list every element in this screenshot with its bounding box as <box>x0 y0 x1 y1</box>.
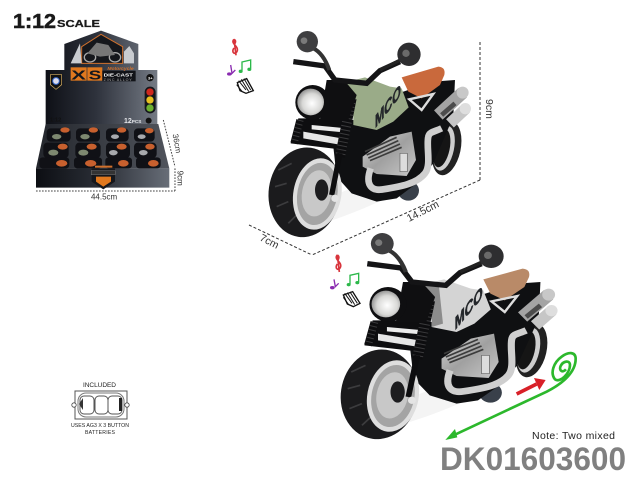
rear exhausts <box>523 289 558 325</box>
scale heading <box>13 11 100 33</box>
box logo XD: Motorcycle <box>107 66 134 72</box>
tank: MCO <box>455 282 483 335</box>
front forks <box>368 300 430 404</box>
age badge: 3+ <box>148 75 153 80</box>
box shield emblem <box>50 75 62 89</box>
frame <box>332 80 455 202</box>
radiator and forks bracket <box>291 118 348 150</box>
mirror left <box>371 233 406 272</box>
dimension labels bike one: 7cm <box>258 232 281 252</box>
treble clef <box>336 255 341 272</box>
speaker icon <box>237 79 253 93</box>
mirror left <box>297 31 329 70</box>
front wheel <box>263 143 347 242</box>
box scale and count labels: 12PCS <box>124 118 141 125</box>
box dimension labels <box>91 133 185 201</box>
age badge <box>146 74 154 81</box>
box logo XD: X <box>71 68 87 82</box>
scale heading: 1:12 <box>13 11 56 33</box>
scale heading: SCALE <box>57 18 100 30</box>
box front orange badge <box>91 166 115 189</box>
tank <box>417 279 491 335</box>
tank <box>339 77 409 133</box>
box inner tray <box>36 124 169 168</box>
silver exhaust pipe <box>448 330 526 392</box>
kickstand wheel <box>479 383 502 403</box>
miniature bikes in tray <box>39 127 161 168</box>
box logo XD <box>71 66 136 82</box>
sound icons top <box>227 39 253 93</box>
motorcycle one: green <box>263 31 471 242</box>
rear exhausts <box>438 87 471 123</box>
red direction arrow <box>517 378 546 394</box>
dimension lines bike one <box>249 42 480 255</box>
headlight <box>369 282 435 322</box>
engine <box>442 334 499 378</box>
dimension labels bike one: 9cm <box>483 99 495 119</box>
seat bracket white <box>492 296 517 312</box>
green note <box>350 273 359 284</box>
motorcycle two: silver <box>335 233 558 444</box>
box scale and count labels: 1:12 <box>50 117 61 123</box>
purple note <box>231 65 235 73</box>
seat <box>402 67 445 98</box>
box dimension lines <box>36 120 175 191</box>
ground shadow <box>281 162 426 238</box>
battery diagram: INCLUDED <box>83 382 116 389</box>
dimension labels bike one: 14.5cm <box>405 198 441 225</box>
mirror right <box>380 43 421 70</box>
headlight <box>295 80 357 120</box>
box logo XD: DIE-CAST <box>104 72 133 78</box>
engine <box>363 132 416 176</box>
handlebars <box>367 264 482 285</box>
speaker icon <box>343 292 360 307</box>
battery diagram <box>71 382 129 436</box>
purple note <box>334 279 339 287</box>
box logo XD: S <box>89 68 101 82</box>
box dimension labels: 9cm <box>176 171 185 186</box>
seat <box>483 269 529 300</box>
dimension labels bike one <box>258 99 495 252</box>
mirror right <box>460 245 504 272</box>
display box <box>36 31 185 201</box>
note text: Note: Two mixed <box>532 430 615 442</box>
battery diagram: USES AG3 X 3 BUTTON <box>71 423 129 429</box>
front forks <box>294 98 352 202</box>
box dimension labels: 36cm <box>171 133 183 154</box>
tank: MCO <box>375 80 401 133</box>
seat bracket white <box>409 94 433 110</box>
box front panel <box>36 168 169 188</box>
box logo XD: ZINC ALLOY <box>104 78 132 82</box>
treble clef <box>233 39 237 55</box>
box scale and count labels <box>50 117 152 125</box>
box back panel <box>46 31 157 126</box>
battery diagram: BATTERIES <box>85 430 116 436</box>
sound icons bottom <box>330 255 360 307</box>
box header badge: motorcycle <box>71 34 134 63</box>
green pull-back spiral arrow <box>445 353 576 440</box>
rear wheel <box>511 321 552 380</box>
silver exhaust pipe <box>368 128 442 190</box>
handlebars <box>293 62 400 83</box>
rear wheel <box>427 119 466 178</box>
front wheel <box>335 345 425 444</box>
frame <box>408 282 540 404</box>
ground shadow <box>354 364 509 440</box>
radiator and forks bracket <box>364 320 426 352</box>
box dimension labels: 44.5cm <box>91 192 118 201</box>
green note <box>242 60 251 71</box>
traffic light <box>145 87 156 113</box>
product code: DK01603600 <box>440 441 626 477</box>
kickstand wheel <box>398 181 419 201</box>
